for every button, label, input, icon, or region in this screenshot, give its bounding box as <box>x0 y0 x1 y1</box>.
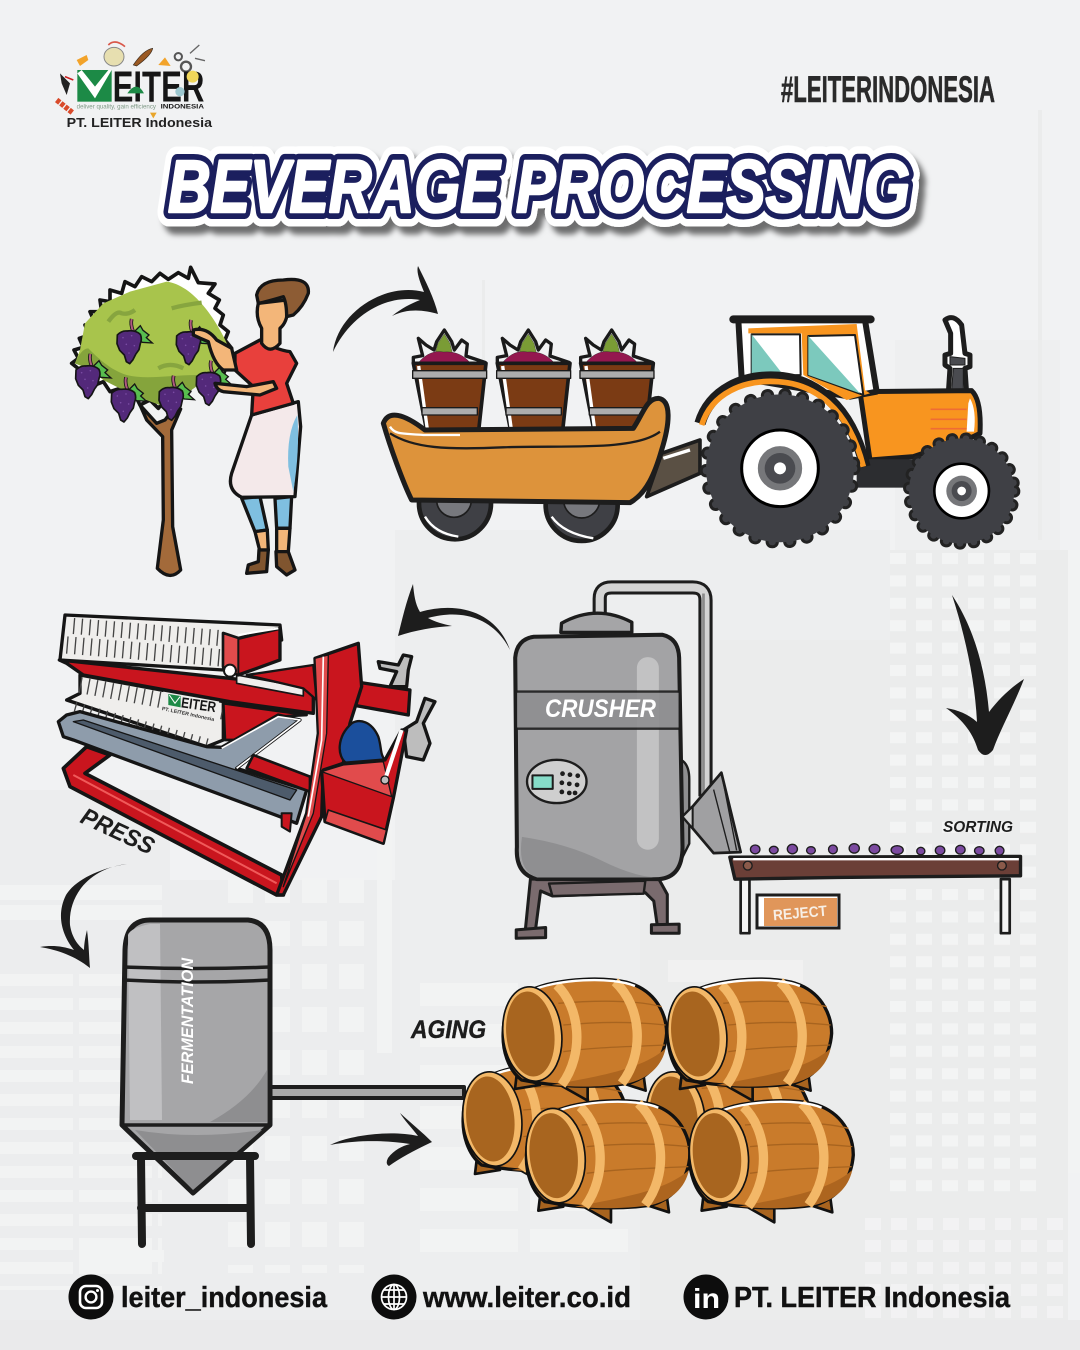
bottom frame <box>63 747 283 895</box>
blue motor <box>340 721 385 766</box>
press logo: EITER <box>180 695 217 716</box>
arrow: press to fermentation <box>40 864 127 968</box>
tree trunk <box>140 405 181 575</box>
crusher lid <box>561 613 632 632</box>
small front wheel <box>909 438 1014 544</box>
lower filter plates <box>67 675 223 747</box>
tree foliage <box>75 282 228 405</box>
linkedin name: PT. LEITER Indonesia <box>734 1282 1011 1314</box>
arrow: tractor to sorting <box>946 595 1024 755</box>
woman picking grapes <box>193 279 308 575</box>
back leg strip <box>288 415 298 492</box>
arrow: harvest to trailer <box>333 266 438 352</box>
tractor hood <box>860 391 980 460</box>
legs <box>242 497 292 532</box>
cross struts <box>247 755 310 792</box>
handle one <box>378 655 412 687</box>
icon: globe <box>372 1274 416 1320</box>
filter press machine <box>58 615 435 895</box>
logo indonesia: INDONESIA <box>161 103 204 110</box>
logo wordmark: EITER <box>113 63 204 111</box>
tree crown outline <box>72 267 232 408</box>
frame inner highlight <box>73 775 277 883</box>
grape clusters <box>76 319 232 422</box>
sorting conveyor <box>730 844 1021 933</box>
hitch highlight <box>663 450 690 458</box>
logo food icons <box>57 42 205 118</box>
shins <box>255 528 290 552</box>
website item <box>372 1274 631 1320</box>
neck and face <box>257 300 287 349</box>
arrow: fermentation to aging <box>330 1113 432 1166</box>
linkedin item <box>684 1274 1011 1320</box>
hood highlight <box>967 398 975 432</box>
tree foliage shade <box>75 348 223 405</box>
back barrels <box>458 1064 810 1186</box>
instagram item <box>68 1274 328 1320</box>
exhaust pipe <box>945 318 970 393</box>
top left barrel <box>498 979 667 1101</box>
grape tree <box>72 267 232 575</box>
main beam <box>247 665 317 700</box>
tractor and trailer <box>383 318 1014 544</box>
icon: linkedin <box>684 1274 728 1320</box>
trailer highlight <box>390 427 460 435</box>
tank highlight <box>128 924 162 1120</box>
top right barrel <box>663 979 832 1101</box>
reject box <box>757 895 839 928</box>
label: aging: AGING <box>410 1016 486 1044</box>
red column under plates <box>223 703 307 740</box>
icon: instagram <box>68 1274 114 1320</box>
tank body <box>122 920 270 1193</box>
logo accents <box>127 71 199 96</box>
conveyor rollers <box>743 861 1006 870</box>
belt highlight <box>733 856 1019 863</box>
tank bands <box>122 967 270 1125</box>
body lower shade <box>521 837 659 877</box>
crusher body <box>515 635 683 879</box>
tractor cab <box>733 319 877 400</box>
press logo <box>159 692 219 724</box>
fermentation tank <box>122 920 464 1244</box>
crusher band <box>516 692 680 729</box>
front left barrel <box>522 1101 690 1222</box>
label: press: PRESS <box>76 803 159 860</box>
front right barrel <box>685 1101 853 1222</box>
conveyor belt <box>730 856 1021 879</box>
trailer with wheels <box>383 330 700 541</box>
control panel <box>527 760 587 803</box>
label: fermentation: FERMENTATION <box>178 957 197 1084</box>
fender <box>700 377 865 467</box>
logo green mark <box>77 70 112 102</box>
logo tagline: deliver quality, gain efficiency <box>77 104 156 110</box>
harvest buckets <box>413 330 654 431</box>
upper arm <box>193 329 237 370</box>
tank stand <box>136 1156 255 1244</box>
hair <box>257 279 308 317</box>
title: BEVERAGE PROCESSING <box>168 145 910 228</box>
trailer rim line <box>390 432 660 448</box>
label: sorting: SORTING <box>943 819 1013 836</box>
top rail <box>59 660 313 713</box>
reject label: REJECT <box>772 903 828 924</box>
instagram handle: leiter_indonesia <box>121 1282 328 1314</box>
top block <box>223 628 280 677</box>
grapes on belt <box>750 844 1004 855</box>
side bulge <box>679 759 689 864</box>
shirt <box>235 340 297 415</box>
title: BEVERAGE PROCESSING <box>168 145 910 228</box>
grey tray <box>58 712 307 832</box>
apron <box>230 402 301 497</box>
logo company name: PT. LEITER Indonesia <box>67 115 213 130</box>
trailer hitch <box>647 440 700 497</box>
motor box <box>322 730 407 843</box>
foliage squiggles <box>108 303 202 368</box>
reject bin <box>757 895 839 928</box>
trailer wheels <box>419 467 618 541</box>
crusher funnel <box>683 773 741 853</box>
crusher legs <box>516 879 679 938</box>
tractor <box>700 318 1014 544</box>
red hub <box>343 680 410 715</box>
logo: PT. LEITER Indonesia <box>57 42 213 130</box>
arrow: crusher to press <box>398 584 510 650</box>
hood vents <box>931 409 967 429</box>
title: BEVERAGE PROCESSING <box>168 145 910 228</box>
top filter plates <box>60 615 282 670</box>
rail white stripe <box>237 675 303 696</box>
transfer pipe <box>268 1087 464 1098</box>
website url: www.leiter.co.id <box>422 1282 631 1314</box>
tank lower shade <box>135 1070 267 1190</box>
handle two <box>403 698 435 760</box>
large rear wheel <box>706 394 854 542</box>
press logo: PT. LEITER Indonesia <box>161 706 215 723</box>
crusher tank <box>515 587 741 938</box>
reject panel <box>764 898 837 926</box>
crusher pipe <box>600 587 706 796</box>
stacked aging barrels <box>458 979 853 1222</box>
label: crusher: CRUSHER <box>545 695 656 723</box>
conveyor legs <box>741 879 1010 933</box>
tractor chassis <box>857 459 920 488</box>
boots <box>247 550 295 575</box>
body highlight <box>637 657 659 850</box>
icon: linkedin: in <box>693 1283 720 1314</box>
footer: social links <box>68 1274 1011 1320</box>
vertical post <box>277 643 362 895</box>
lower arm <box>215 382 277 395</box>
trailer bed <box>383 398 668 503</box>
